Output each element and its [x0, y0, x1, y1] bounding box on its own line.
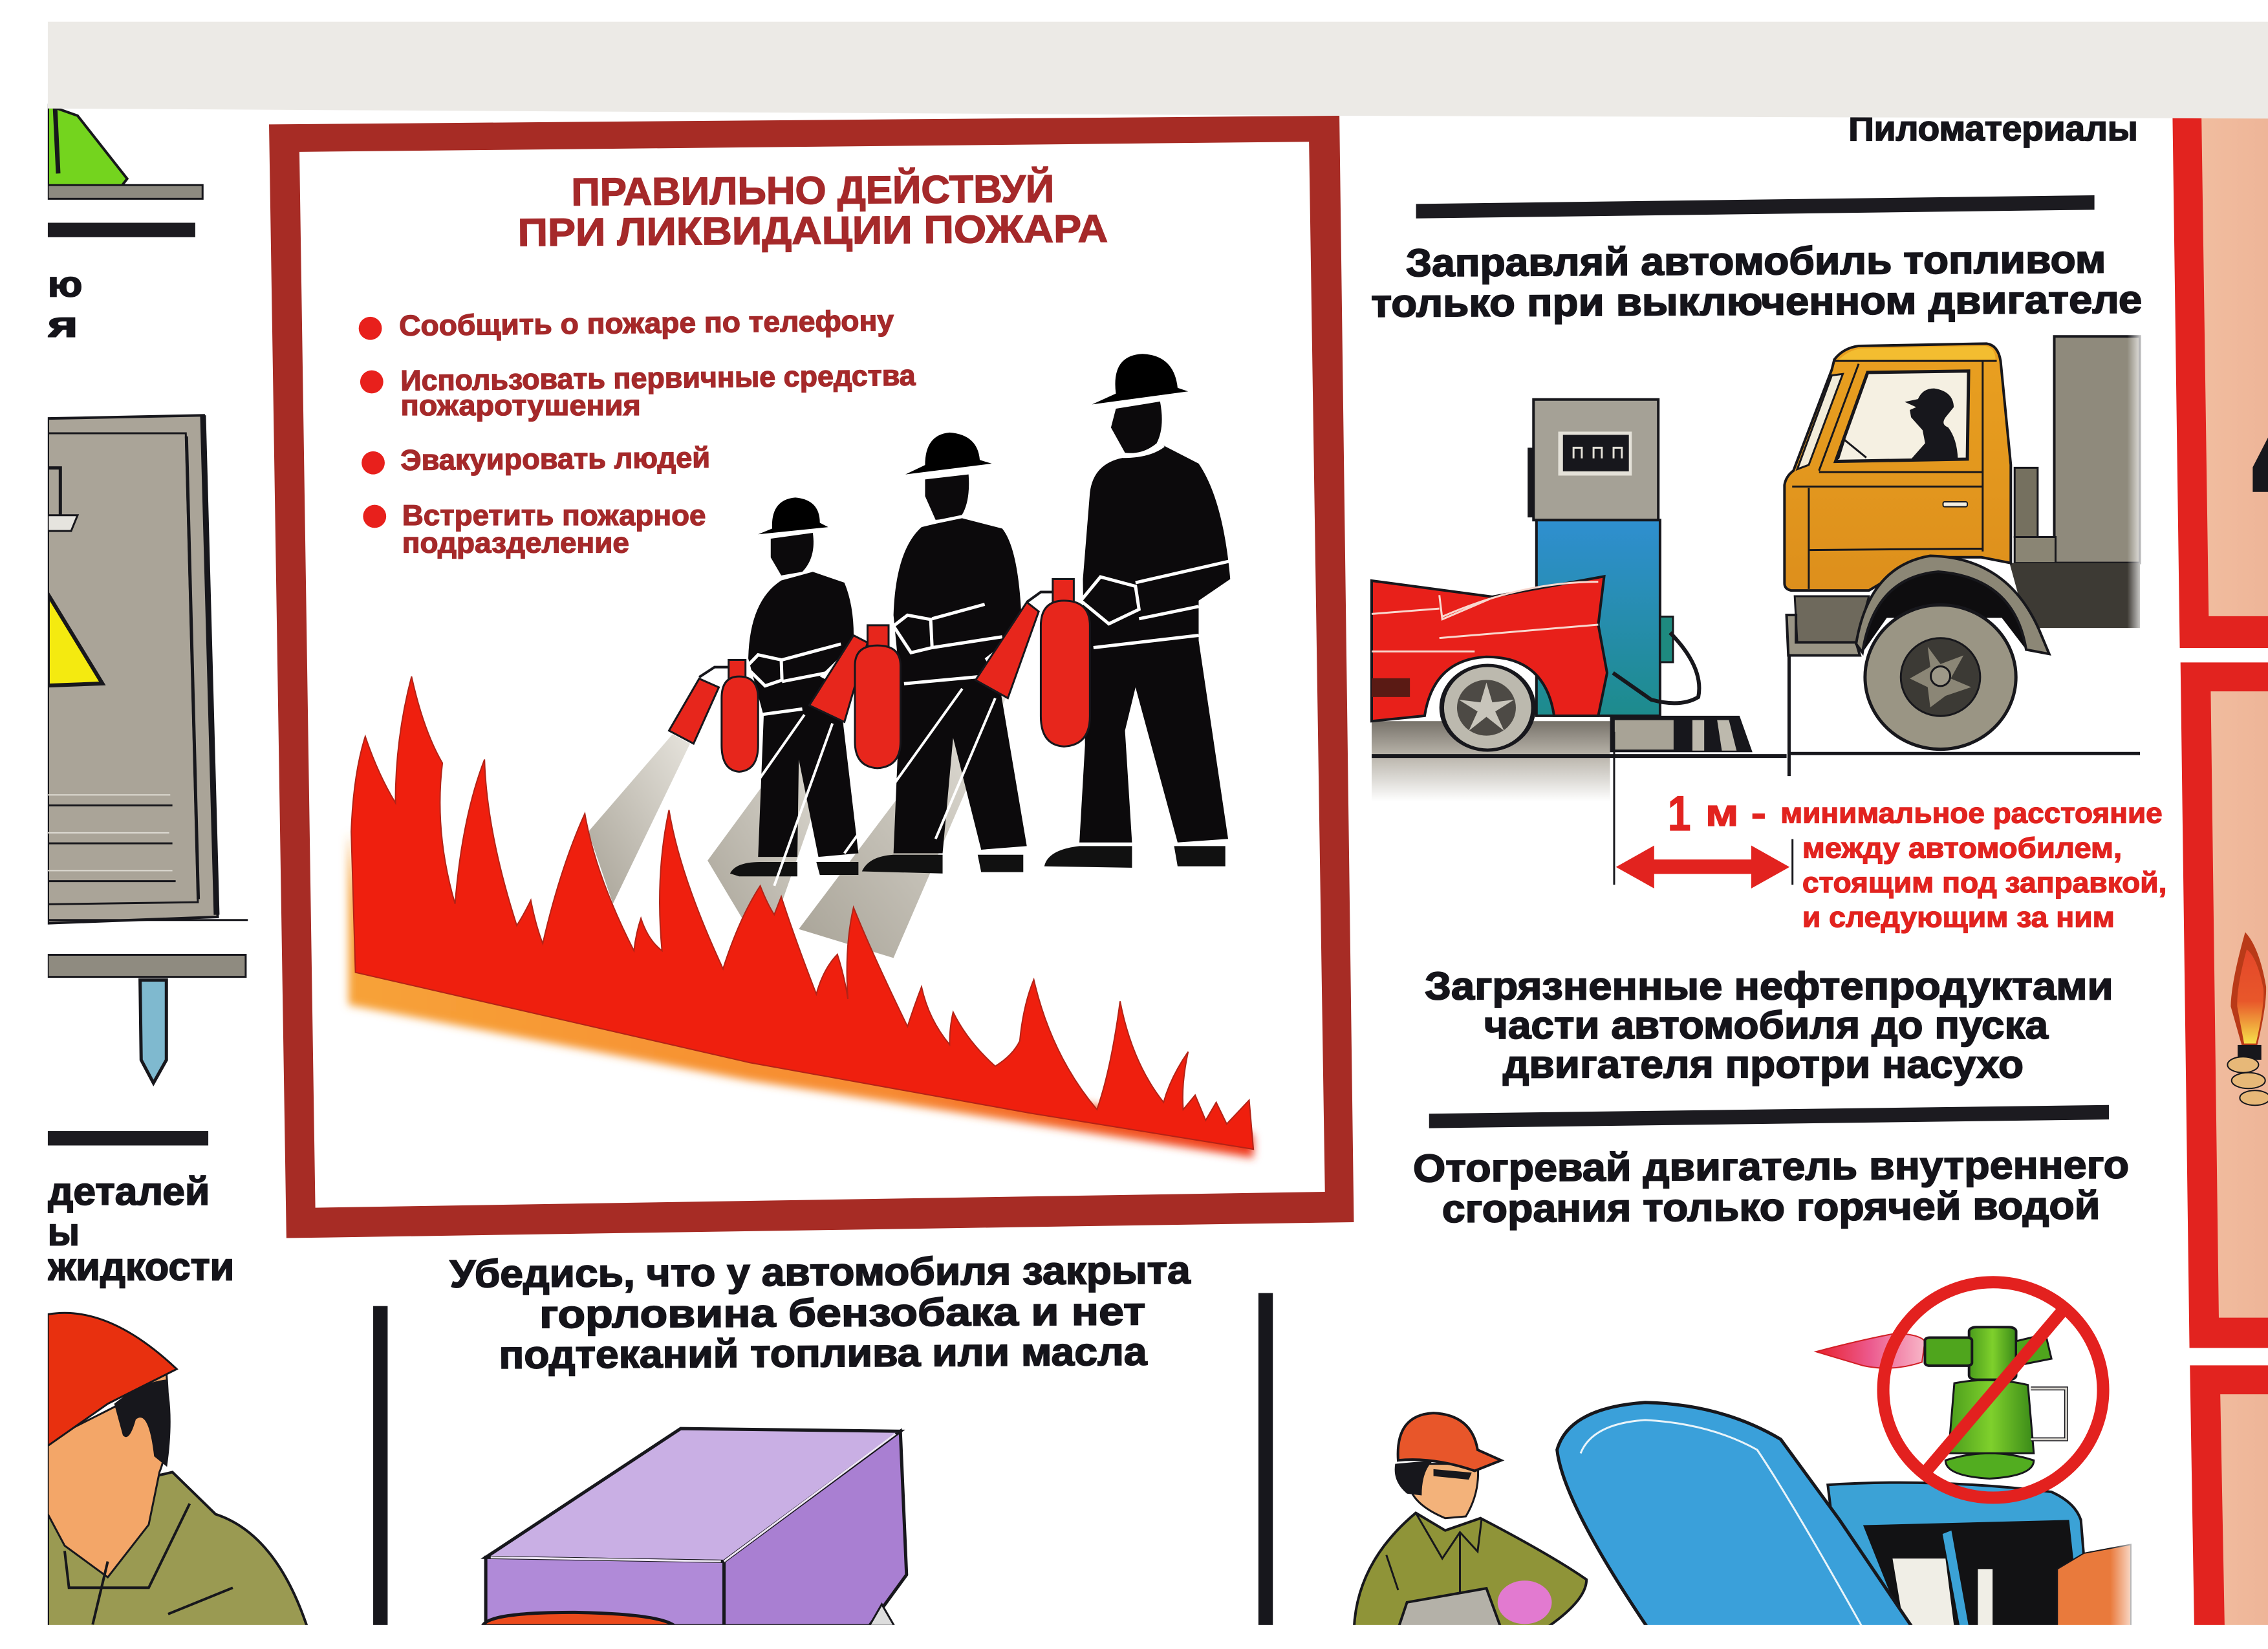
left text fragment lower: жидкости	[47, 1244, 234, 1288]
action list: Эвакуировать людей	[400, 442, 710, 477]
ground shadow	[1372, 721, 1610, 802]
icon: warning triangle fragment	[2252, 438, 2268, 492]
refuelling illustration	[1372, 400, 1793, 889]
text: wipe contaminated parts: части автомобиля до пуска	[1484, 1003, 2048, 1047]
rule above refuelling section	[1416, 195, 2095, 219]
top scanner shadow strip	[48, 22, 2268, 118]
truck cab	[1784, 343, 2011, 590]
truck	[1784, 335, 2147, 776]
fuel hose	[1613, 632, 1699, 703]
text: wipe contaminated parts: Загрязненные нефтепродуктами	[1425, 964, 2113, 1008]
flames glow	[349, 832, 1253, 1158]
purple truck tent	[482, 1428, 907, 1626]
ground line	[1372, 754, 1787, 758]
left rule upper	[48, 222, 195, 237]
left text fragment lower: деталей	[48, 1169, 210, 1213]
extinguisher middle	[809, 625, 900, 768]
heading: refuelling: Заправляй автомобиль топливом	[1406, 237, 2106, 285]
engine warming illustration	[1354, 1327, 2140, 1632]
prohibition sign	[1883, 1282, 2103, 1498]
warning triangle	[48, 594, 102, 685]
left text fragment lower	[47, 1169, 234, 1288]
icons on right panels	[2227, 438, 2268, 1105]
caption: check the fuel cap: Убедись, что у автомобиля закрыта	[449, 1248, 1191, 1296]
pot of hot water	[1398, 1588, 1501, 1628]
left text fragment upper: ю	[48, 264, 82, 305]
callout: minimum distance	[1668, 786, 2166, 934]
truck wheel	[1865, 605, 2016, 749]
left text fragment lower: ы	[48, 1210, 80, 1254]
callout: minimum distance: и следующим за ним	[1802, 902, 2115, 934]
fuel pump	[1528, 400, 1753, 752]
truck driver silhouette	[1905, 389, 1958, 459]
panel title	[517, 166, 1108, 254]
red car	[1372, 576, 1607, 751]
heading: warming the engine: Отогревай двигатель внутреннего	[1413, 1143, 2129, 1190]
text: wipe contaminated parts: двигателя протри насухо	[1503, 1042, 2024, 1086]
icon: green object on shelf	[48, 105, 202, 199]
action list	[359, 305, 916, 559]
shelf and blue peg	[48, 920, 248, 1083]
peach panel backgrounds	[2201, 116, 2268, 1626]
truck box	[2055, 336, 2140, 563]
truck fender	[1863, 572, 2026, 652]
icon: hand with burning torch	[2227, 932, 2268, 1105]
flames	[351, 676, 1253, 1149]
callout: minimum distance: 1	[1668, 786, 1691, 841]
worker	[1354, 1413, 1586, 1628]
callout: minimum distance: минимальное расстояние	[1780, 798, 2163, 830]
truck chassis	[2009, 563, 2140, 628]
pink rag	[1498, 1580, 1551, 1624]
heading: refuelling: только при выключенном двигателе	[1371, 277, 2142, 325]
truck bumper	[1795, 596, 1869, 642]
left rule lower	[48, 1131, 208, 1145]
right neighbouring panels	[2172, 116, 2268, 1626]
text: lumber label: Пиломатериалы	[1848, 109, 2138, 148]
action list: Использовать первичные средства	[400, 360, 916, 397]
rule above engine warming section	[1429, 1105, 2109, 1128]
heading: refuelling	[1371, 237, 2142, 325]
blowlamp	[1816, 1327, 2066, 1478]
firefighters and flames illustration	[349, 354, 1253, 1158]
extinguisher sprays	[589, 687, 1006, 958]
red borders	[2172, 116, 2268, 1626]
callout: minimum distance: между автомобилем,	[1802, 832, 2122, 864]
caption: check the fuel cap: горловина бензобака и нет	[539, 1289, 1145, 1336]
action list: Сообщить о пожаре по телефону	[399, 305, 894, 342]
action list: подразделение	[402, 527, 629, 559]
action list: пожаротушения	[401, 390, 641, 422]
callout: minimum distance: стоящим под заправкой,	[1802, 867, 2166, 899]
truck cab	[1828, 1483, 2140, 1632]
firefighter small	[730, 497, 858, 876]
extinguisher small	[669, 660, 758, 771]
heading: warming the engine: сгорания только горячей водой	[1442, 1183, 2101, 1231]
panel frame	[269, 116, 1354, 1238]
spray edge lines	[742, 689, 995, 886]
vertical rule right	[1258, 1293, 1273, 1626]
text: wipe contaminated parts	[1425, 964, 2113, 1086]
callout: minimum distance: м -	[1705, 792, 1766, 834]
panel title: ПРИ ЛИКВИДАЦИИ ПОЖАРА	[517, 206, 1108, 254]
raised bonnet	[1557, 1403, 1913, 1628]
firefighter large	[1044, 354, 1230, 868]
panel title: ПРАВИЛЬНО ДЕЙСТВУЙ	[571, 166, 1055, 214]
vertical rule left	[373, 1306, 387, 1626]
extinguisher large	[976, 579, 1090, 746]
firefighter middle	[862, 433, 1027, 874]
truck ground line and dimension line	[1789, 656, 2140, 776]
worker in red helmet	[48, 1313, 312, 1641]
electrical cabinet	[48, 415, 218, 923]
caption: check the fuel cap	[449, 1248, 1191, 1377]
action list: Встретить пожарное	[402, 500, 706, 532]
heading: warming the engine	[1413, 1143, 2129, 1231]
dimension arrow	[1614, 732, 1793, 889]
left column cut-off illustrations	[48, 105, 312, 1641]
left text fragment upper: я	[47, 304, 78, 345]
left text fragment upper	[47, 264, 82, 345]
caption: check the fuel cap: подтеканий топлива или масла	[499, 1330, 1147, 1377]
panel: fire extinguishing	[269, 116, 1354, 1238]
